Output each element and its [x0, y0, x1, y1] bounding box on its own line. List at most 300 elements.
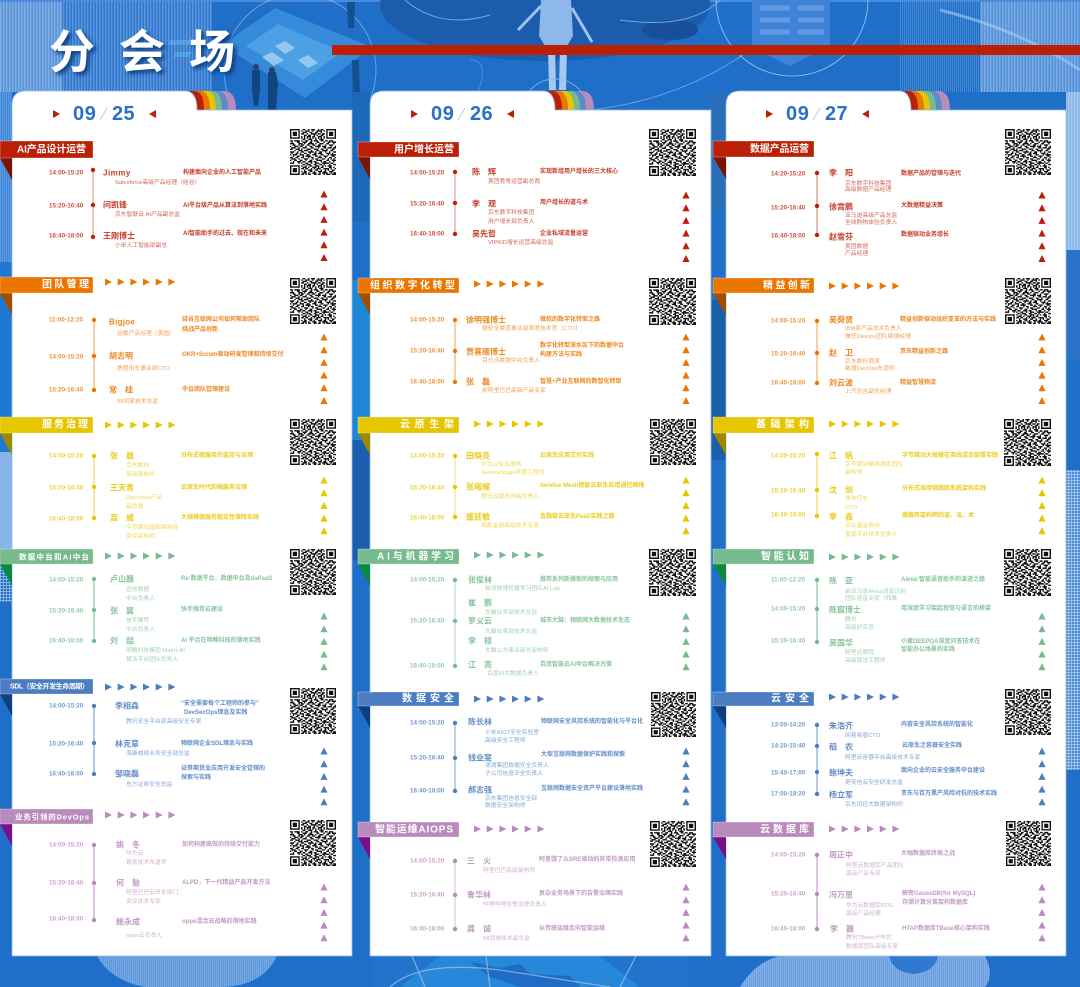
- sessions: 算法平台团队负责人: [126, 655, 178, 663]
- sessions: 15:20-16:40: [49, 202, 84, 210]
- up arrows: [1038, 334, 1046, 404]
- sessions: 郝志强: [468, 784, 492, 794]
- track: intelligent cognition: [713, 549, 1051, 670]
- sessions: Salesforce高级产品经理（硅谷）: [115, 178, 200, 186]
- sessions: 携程用车事业部CTO: [117, 364, 170, 372]
- sessions: 张俊林: [468, 574, 492, 584]
- timeline: [453, 454, 457, 519]
- timeline: [453, 578, 457, 668]
- sessions: 15:20-16:40: [771, 890, 806, 898]
- sessions: [771, 720, 997, 808]
- sessions: 15:20-16:40: [771, 204, 806, 212]
- sessions: IBM某产品技术负责人: [845, 324, 902, 332]
- sessions: 美团数据: [845, 242, 868, 250]
- sessions: 构建方法与实践: [540, 350, 582, 358]
- sessions: 15:20-16:40: [771, 638, 806, 644]
- rainbow tab: [546, 91, 594, 110]
- sessions: 副总裁: [126, 502, 144, 510]
- track: data security: [358, 692, 696, 809]
- sessions: 陈 辉: [472, 166, 496, 176]
- sessions: 11:00-12:20: [771, 576, 805, 584]
- track: data platform and AI platform: [0, 549, 336, 670]
- sessions: 14:00-15:20: [410, 452, 445, 460]
- sessions: [410, 314, 624, 394]
- sessions: 华为公有云服务: [481, 460, 522, 468]
- right arrows: [474, 420, 544, 428]
- sessions: 团队语音专家（西雅: [845, 594, 897, 602]
- QR code: [649, 549, 696, 596]
- sessions: 张 翼: [110, 606, 134, 616]
- track: cloud database: [713, 821, 1051, 950]
- sessions: 高级数据产品经理: [845, 185, 892, 193]
- ribbon: [358, 822, 459, 859]
- ribbon: 服务治理: [42, 418, 88, 430]
- up arrows: [1038, 748, 1046, 805]
- sessions: 冯万里: [829, 890, 853, 900]
- sessions: 大脑业务部技术总监: [485, 627, 537, 635]
- sessions: 企业私域流量运营: [540, 229, 588, 237]
- sessions: 李 鑫: [829, 512, 853, 522]
- sessions: 15:20-16:40: [410, 200, 445, 208]
- sessions: 数据安全架构师: [485, 801, 526, 809]
- right arrows: [474, 826, 544, 832]
- sessions: 15:20-16:40: [771, 488, 806, 494]
- sessions: 王刚博士: [103, 230, 135, 240]
- sessions: 数据库团队高级专家: [846, 942, 898, 950]
- ribbon: 智能认知: [761, 550, 809, 562]
- sessions: 13:00-14:20: [771, 722, 806, 728]
- sessions: 16:40-18:00: [771, 926, 806, 932]
- QR code: [1005, 689, 1051, 735]
- sessions: 16:40-18:00: [410, 514, 445, 522]
- sessions: 快狗打车: [845, 494, 868, 502]
- date: 09: [431, 103, 454, 125]
- track: user growth: [358, 129, 696, 262]
- sessions: 京东数字科技集团: [845, 179, 892, 187]
- right arrows: [829, 282, 899, 290]
- sessions: 京东数科首席: [845, 357, 880, 365]
- timeline: [92, 577, 96, 643]
- sessions: 大咖数据库终局之战: [901, 849, 955, 857]
- sessions: 赵 卫: [829, 348, 853, 358]
- sessions: 数字化转型深水区下的数据中台: [540, 341, 624, 349]
- sessions: 阿里云数据库产品团队: [846, 861, 904, 869]
- sessions: [410, 855, 635, 942]
- sessions: 华为云数据库RDS: [846, 901, 893, 909]
- ribbon: [713, 278, 814, 315]
- sessions: 字节跳动编排调度团队: [845, 460, 903, 468]
- title bar: [332, 45, 1080, 55]
- date: [766, 103, 869, 125]
- sessions: 14:00-15:20: [49, 354, 84, 360]
- sessions: [410, 450, 644, 529]
- sessions: 用深度学习架起视觉与语言的桥梁: [901, 604, 991, 612]
- sessions: 14:00-15:20: [771, 852, 806, 858]
- sessions: 中台负责人: [126, 625, 155, 633]
- sessions: 前阿里巴巴高级产品专家: [482, 386, 546, 394]
- sessions: [410, 166, 618, 246]
- sessions: 17:00-18:20: [771, 790, 806, 798]
- sessions: 罗义云: [468, 616, 492, 626]
- sessions: 16:40-18:00: [410, 662, 445, 670]
- sessions: AI 平台在明略科技的落地实践: [181, 636, 261, 644]
- sessions: 天弘基金移动: [845, 521, 880, 529]
- timeline: [92, 318, 96, 392]
- ribbon: [358, 692, 459, 728]
- sessions: Service Mesh使能云原生应用通信网格: [540, 481, 644, 489]
- sessions: 腾讯安全平台部高级安全专家: [126, 717, 202, 725]
- sessions: 16:40-18:00: [49, 516, 84, 522]
- sessions: 分布式微服务的监控与治理: [181, 451, 253, 459]
- sessions: 15:20-16:40: [410, 892, 445, 898]
- sessions: 杨立军: [829, 790, 853, 800]
- panel card: [12, 91, 352, 956]
- sessions: 14:00-15:20: [771, 318, 806, 324]
- sessions: 14:00-15:20: [49, 702, 84, 710]
- sessions: 高级研究员: [845, 623, 874, 631]
- sessions: 常 桂: [109, 384, 133, 394]
- sessions: 张 磊: [466, 378, 490, 386]
- ribbon: [0, 679, 93, 716]
- ribbon: [713, 549, 814, 586]
- sessions: 大规模微服务稳定性保障实践: [181, 513, 259, 521]
- sessions: 何 勉: [116, 878, 140, 888]
- sessions: [771, 450, 998, 538]
- sessions: 金融级云原生PaaS实践之路: [540, 512, 615, 520]
- sessions: Jimmy: [103, 168, 131, 178]
- sessions: 分布式调用链跟踪系统架构实践: [902, 484, 986, 492]
- QR code: [290, 278, 336, 324]
- ribbon: [713, 417, 814, 455]
- ribbon: 组织数字化转型: [370, 278, 455, 292]
- sessions: 鲁华林: [467, 890, 491, 900]
- timeline: [92, 704, 96, 776]
- sessions: 复杂业务场景下的告警治理实践: [539, 889, 623, 897]
- QR code: [1004, 419, 1051, 466]
- sessions: AI平台级产品从算法到落地实践: [183, 201, 267, 209]
- sessions: 谷歌产品经理（美国）: [117, 329, 175, 337]
- ribbon: 数据产品运营: [750, 142, 809, 155]
- ribbon: AI与机器学习: [377, 550, 454, 562]
- QR code: [290, 419, 336, 465]
- sessions: 推荐系列新模型的探索与应用: [540, 575, 618, 583]
- sessions: 百度智能云AI中台解决方案: [540, 660, 612, 668]
- up arrows: [320, 334, 328, 404]
- sessions: 58到家技术总监: [117, 397, 158, 405]
- sessions: 阿里巴巴云研发部门: [126, 888, 178, 896]
- sessions: 解密GaussDB(for MySQL): [902, 889, 975, 897]
- QR code: [290, 688, 336, 734]
- sessions: 探索与实践: [181, 773, 211, 781]
- sessions: 江 亮: [468, 660, 492, 670]
- timeline: [453, 859, 457, 931]
- ribbon: [0, 277, 93, 315]
- up arrows: [1038, 884, 1046, 941]
- sessions: 李 巍: [830, 924, 854, 934]
- sessions: 海康威视业务安全部总监: [126, 749, 190, 757]
- sessions: 高级产品专家: [846, 869, 881, 877]
- QR code: [290, 820, 336, 866]
- up arrows: [320, 190, 328, 261]
- sessions: 前亚马逊Alexa语音识别: [845, 587, 906, 595]
- date: 27: [825, 103, 848, 125]
- up arrows: [682, 476, 690, 534]
- sessions: 百度AI大数据负责人: [487, 669, 539, 677]
- sessions: [49, 699, 265, 788]
- sessions: 14:00-15:20: [410, 316, 445, 324]
- sessions: 张 晨: [110, 452, 134, 460]
- sessions: ServiceStage首席工程师: [481, 468, 545, 476]
- sessions: 首席技术布道师: [126, 858, 167, 866]
- sessions: 15:20-16:40: [410, 618, 445, 624]
- sessions: 卢山巍: [110, 574, 134, 584]
- timeline: [815, 452, 819, 518]
- right arrows: [474, 696, 544, 702]
- right arrows: [829, 554, 899, 560]
- sessions: 微软的数字化转型之路: [540, 315, 600, 323]
- sessions: 16:40-18:00: [771, 232, 806, 240]
- sessions: 中台团队管理建设: [182, 385, 230, 393]
- right arrows: [474, 552, 544, 558]
- sessions: 刘云波: [829, 378, 853, 388]
- sessions: 16:40-18:00: [49, 232, 84, 240]
- sessions: 14:20-15:40: [771, 742, 806, 750]
- sessions: 贾喜顺博士: [466, 346, 506, 356]
- sessions: Daocloud产品: [126, 493, 162, 501]
- track: cloud security: [713, 689, 1051, 808]
- ribbon: 云原生架: [400, 418, 454, 430]
- sessions: 15:20-16:40: [49, 740, 84, 748]
- sessions: 林克章: [115, 738, 139, 748]
- timeline: [815, 723, 819, 796]
- sessions: 16:40-18:00: [49, 638, 84, 644]
- sessions: oppo混合云战略的落地实践: [182, 917, 257, 925]
- sessions: 李 阳: [829, 168, 853, 178]
- up arrows: [320, 884, 328, 941]
- sessions: 小米人工智能部副总: [115, 241, 167, 249]
- sessions: 美团秀秀运营副总裁: [488, 177, 540, 185]
- sessions: 16:40-18:00: [410, 788, 445, 794]
- sessions: 陈长林: [468, 716, 492, 726]
- ribbon: [0, 549, 93, 586]
- sessions: 问凯锋: [103, 200, 127, 210]
- sessions: 奇安信云安全研发总监: [845, 778, 903, 786]
- sessions: DevSecOps理念及实践: [184, 708, 247, 716]
- sessions: 徐霄鹏: [829, 202, 853, 212]
- sessions: oppo云负责人: [126, 931, 162, 939]
- sessions: 中台负责人: [126, 594, 155, 602]
- sessions: [49, 574, 272, 663]
- illustration: phone and people: [167, 0, 376, 146]
- sessions: 精益创新驱动组织变革的方法与实践: [900, 315, 996, 323]
- sessions: 盛延敏: [466, 512, 490, 522]
- sessions: 15:20-16:40: [49, 386, 84, 394]
- sessions: 赵雪芬: [829, 232, 853, 242]
- sessions: 如何构建高效的持续交付能力: [182, 840, 260, 848]
- sessions: 亚马逊高级产品总监: [845, 211, 897, 219]
- up arrows: [320, 612, 328, 670]
- track: AI product design: [0, 129, 336, 261]
- ribbon: [0, 141, 93, 180]
- title: 分会场: [49, 16, 259, 82]
- sessions: 14:00-15:20: [49, 842, 84, 848]
- sessions: 大脑业务部技术总监: [485, 608, 537, 616]
- sessions: [410, 716, 643, 809]
- sessions: 陈 亚: [829, 576, 853, 586]
- sessions: 网易易盾CTO: [845, 732, 881, 739]
- sessions: 腾讯: [845, 615, 857, 623]
- up arrows: [682, 884, 690, 941]
- panel card: [370, 91, 711, 956]
- sessions: 东方证券安全总监: [126, 780, 173, 788]
- sessions: 吴舜贤: [829, 314, 853, 324]
- up arrows: [1038, 612, 1046, 670]
- QR code: [1005, 129, 1051, 175]
- sessions: [49, 168, 267, 249]
- sessions: 朱浩齐: [829, 720, 853, 730]
- date: 26: [470, 103, 493, 125]
- track: digital transformation: [358, 278, 696, 404]
- sessions: HTAP数据库TBase核心架构实践: [902, 924, 990, 932]
- sessions: 数据产品的管理与迭代: [901, 169, 961, 177]
- up arrows: [1038, 476, 1046, 534]
- date: 09: [73, 103, 96, 125]
- sessions: 架构师: [845, 468, 863, 476]
- sessions: 华为云: [126, 849, 144, 857]
- track: team management: [0, 277, 336, 405]
- timeline: [453, 170, 457, 236]
- track: DevOps: [0, 809, 336, 941]
- sessions: 硅谷互联网公司如何帮助团队: [182, 315, 260, 323]
- sessions: 用户增长的道与术: [540, 198, 588, 206]
- up arrows: [320, 476, 328, 534]
- sessions: 百分点数据中台负责人: [482, 356, 540, 364]
- timeline: [815, 853, 819, 931]
- QR code: [651, 692, 696, 737]
- sessions: 字节跳动大规模在离线混合部署实践: [902, 451, 998, 459]
- sessions: 15:20-16:40: [410, 754, 445, 762]
- QR code: [1004, 549, 1051, 596]
- sessions: 云原生时代的微服务治理: [181, 483, 247, 491]
- sessions: 16:40-18:00: [771, 380, 806, 386]
- sessions: 胡志明: [109, 350, 133, 360]
- sessions: [49, 315, 284, 405]
- sessions: 内容安全风控系统的智能化: [901, 720, 973, 728]
- sessions: 哔哩哔哩告警治理负责人: [483, 900, 547, 908]
- right arrows: [105, 278, 175, 286]
- ribbon: 云数据库: [760, 822, 809, 836]
- up arrows: [682, 334, 690, 404]
- track: infrastructure: [713, 417, 1051, 538]
- sessions: 上汽安吉副总经理: [845, 387, 892, 395]
- sessions: 小蜜DEEPQA深度问答技术在: [901, 637, 980, 645]
- panel: 09/25: [0, 91, 352, 956]
- ribbon: 云安全: [771, 692, 809, 704]
- sessions: CTO: [845, 505, 858, 511]
- sessions: 字节跳动基础架构部: [126, 523, 178, 531]
- sessions: 城市大脑：物联网大数据技术生态: [540, 616, 630, 624]
- ribbon: [713, 141, 814, 179]
- sessions: 兼任Devops团队敏捷经理: [845, 332, 911, 340]
- sessions: 高级安全工程师: [485, 736, 526, 744]
- timeline: [815, 171, 819, 237]
- ribbon: [358, 549, 459, 586]
- track: lean innovation: [713, 278, 1051, 404]
- sessions: 阿里巴巴高级架构师: [483, 866, 535, 874]
- sessions: 吴国华: [829, 638, 853, 648]
- QR code: [650, 821, 696, 867]
- track: cloud native: [358, 417, 696, 534]
- sessions: 15:20-16:40: [410, 484, 445, 492]
- sessions: 16:40-18:00: [410, 378, 445, 386]
- panel: 09/27: [713, 91, 1066, 956]
- track: AI and machine learning: [358, 549, 696, 677]
- right arrows: [105, 552, 175, 560]
- sessions: “安全需要每个工程师的参与”: [181, 699, 259, 707]
- sessions: 新浪微博机器学习团队AI Lab: [485, 584, 560, 592]
- sessions: 姚 冬: [116, 840, 140, 850]
- panel: 09/26: [358, 91, 711, 956]
- ribbon: [713, 822, 814, 859]
- right arrows: [829, 826, 899, 832]
- sessions: 15:20-16:40: [410, 348, 445, 354]
- sessions: ALPD，下一代精益产品开发方法: [182, 878, 270, 886]
- sessions: 资深架构师: [126, 532, 155, 540]
- sessions: 江 帆: [829, 450, 853, 460]
- sessions: 14:00-15:20: [771, 452, 806, 460]
- ribbon: [358, 142, 459, 179]
- illustration: globe blob and robot: [380, 0, 750, 145]
- QR code: [649, 278, 696, 325]
- sessions: 鲍永成: [116, 916, 140, 926]
- ribbon: 业务引领的DevOps: [15, 812, 89, 822]
- sessions: [771, 849, 990, 950]
- timeline: [92, 454, 96, 520]
- ribbon: [713, 692, 814, 728]
- ribbon: SDL（安全开发生命周期）: [10, 682, 89, 690]
- up arrows: [1038, 192, 1046, 262]
- sessions: [49, 451, 259, 540]
- ribbon: 团队管理: [42, 278, 89, 290]
- timeline: [815, 578, 819, 644]
- ribbon: [358, 278, 459, 315]
- sessions: 快手推荐: [126, 616, 149, 624]
- sessions: 资深技术专家: [126, 897, 161, 905]
- sessions: 王天青: [110, 482, 134, 492]
- sessions: 蚂蚁金服高级技术专家: [481, 521, 539, 529]
- right arrows: [105, 684, 175, 690]
- QR code: [649, 129, 696, 176]
- sessions: OKR+Scrum驱动研发管理和持续交付: [182, 350, 284, 358]
- sessions: 钱业斐: [468, 752, 492, 762]
- sessions: 微服务架构师的道、法、术: [902, 511, 974, 519]
- sessions: 大脑公共事业部总架构师: [485, 646, 549, 654]
- ribbon: [0, 417, 93, 455]
- ribbon: 数据安全: [402, 692, 454, 704]
- sessions: 15:40-17:00: [771, 770, 806, 776]
- sessions: 14:00-15:20: [410, 576, 445, 584]
- sessions: 16:40-18:00: [771, 512, 806, 518]
- sessions: 资深架构师: [126, 470, 155, 478]
- sessions: 14:20-15:20: [771, 170, 806, 178]
- sessions: 鲍坤夫: [829, 768, 853, 778]
- sessions: 腾讯TBase分布式: [846, 933, 892, 941]
- QR code: [290, 549, 336, 595]
- sessions: [49, 840, 270, 939]
- sessions: VIPKID增长运营高级总监: [488, 238, 554, 246]
- sessions: [771, 575, 991, 664]
- sessions: 存储计算分离架构数据库: [902, 898, 968, 906]
